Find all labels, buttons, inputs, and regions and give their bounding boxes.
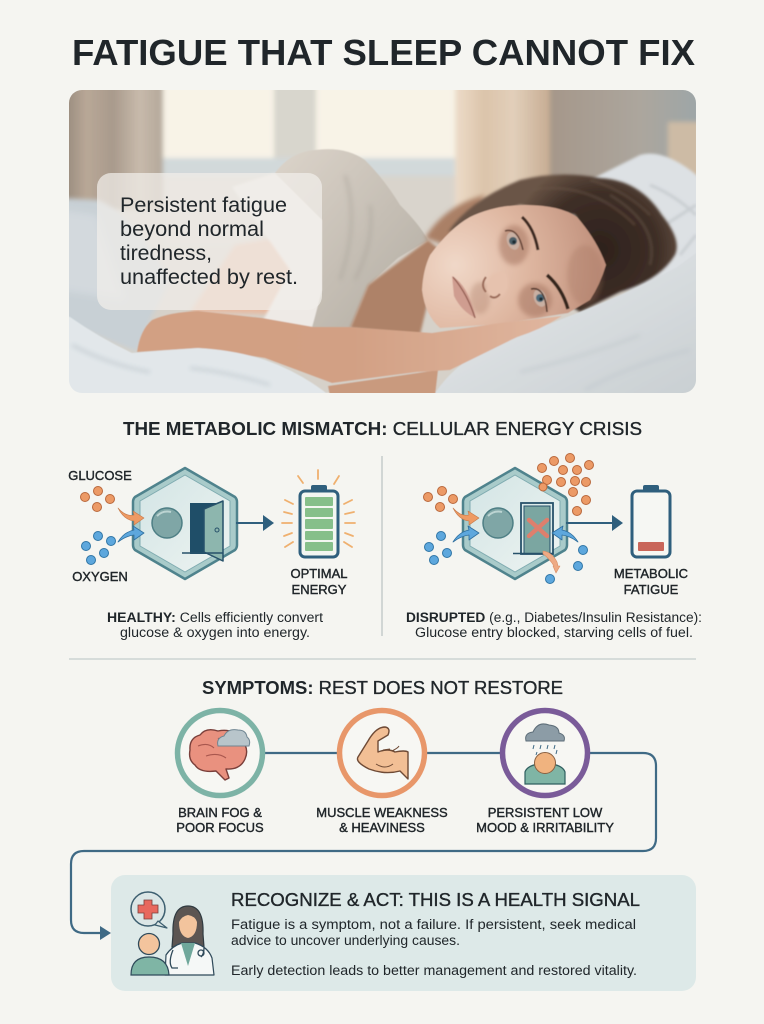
caption: healthy: glucose & oxygen into energy. [120, 625, 310, 640]
label: muscle weakness [316, 805, 448, 835]
photo: tired woman lying in bed [60, 80, 700, 396]
arrow: glucose deflected [543, 551, 560, 573]
arrow: oxygen into cell [118, 526, 144, 542]
neck and shoulder skin [350, 240, 440, 335]
excess glucose cluster [538, 454, 594, 516]
label: glucose: GLUCOSE [68, 468, 132, 483]
icon: person under rain cloud [502, 710, 588, 796]
section heading: metabolic mismatch: THE METABOLIC MISMATCH: CELLULAR ENERGY CRISIS [123, 419, 642, 439]
callout: photo caption: Persistent fatigue [120, 194, 287, 217]
closed door with X [513, 503, 553, 554]
glucose molecules [80, 486, 114, 512]
back pillow [590, 154, 700, 290]
caption: healthy [107, 610, 323, 640]
callout: photo caption: unaffected by rest. [120, 266, 298, 289]
eye shadows [470, 225, 603, 317]
label: optimal energy [290, 566, 348, 597]
label: brain fog [176, 805, 264, 835]
shirt [275, 149, 428, 328]
panel: disrupted cell [406, 454, 702, 640]
arrow: cell to fatigue [566, 515, 623, 531]
front pillow [436, 283, 696, 393]
label: metabolic fatigue [614, 566, 688, 597]
icon: brain with cloud [178, 710, 262, 796]
arrow: glucose into cell [118, 508, 144, 525]
label: optimal energy: OPTIMAL [290, 566, 348, 581]
action heading: RECOGNIZE & ACT: THIS IS A HEALTH SIGNAL [231, 890, 640, 910]
arrow: oxygen entering [453, 526, 479, 542]
connector arrow: symptoms to action [71, 753, 656, 940]
hair [448, 174, 677, 312]
label: low mood: MOOD & IRRITABILITY [476, 820, 614, 835]
icon: low battery [632, 485, 670, 557]
caption: disrupted: DISRUPTED (e.g., Diabetes/Insulin Resistance): [406, 610, 702, 625]
arm [137, 311, 562, 383]
label: optimal energy: ENERGY [292, 582, 347, 597]
label: metabolic fatigue: FATIGUE [624, 582, 679, 597]
sleeve [264, 220, 322, 327]
caption: healthy: HEALTHY: Cells efficiently convert [107, 610, 323, 625]
arrow: glucose entering [453, 508, 479, 525]
oxygen molecules [82, 532, 116, 564]
callout: photo caption [97, 173, 322, 310]
caption: disrupted: Glucose entry blocked, starving cells of fuel. [415, 625, 693, 640]
label: muscle weakness: & HEAVINESS [339, 820, 425, 835]
title: FATIGUE THAT SLEEP CANNOT FIX [72, 32, 695, 73]
hair wisps [425, 195, 485, 245]
glucose molecules outside [424, 486, 458, 512]
caption: disrupted [406, 610, 702, 640]
icon: flexed arm [340, 710, 424, 796]
healthy cell hexagon [133, 468, 237, 579]
panel: recognize and act [111, 875, 696, 991]
label: muscle weakness: MUSCLE WEAKNESS [316, 805, 448, 820]
blanket [69, 316, 326, 393]
panel: healthy cell [68, 468, 355, 640]
oxygen molecules outside [424, 532, 588, 584]
icon: full battery [282, 470, 355, 557]
action text: advice to uncover underlying causes. [231, 933, 460, 948]
upper arm behind callout [190, 240, 288, 316]
nostril [483, 277, 500, 298]
icon: patient and doctor [131, 892, 214, 975]
action text [231, 917, 637, 978]
callout: photo caption: tiredness, [120, 242, 212, 265]
section heading: symptoms: SYMPTOMS: REST DOES NOT RESTORE [202, 678, 563, 698]
symptom: muscle weakness [316, 710, 448, 835]
symptom: brain fog [176, 710, 264, 835]
left sheets [69, 196, 154, 350]
open door [182, 501, 223, 561]
arrow: cell to energy [236, 515, 274, 531]
action text: Early detection leads to better management and restored vitality. [231, 963, 637, 978]
symptom: low mood [476, 710, 614, 835]
face [422, 205, 606, 328]
eyes and brows [504, 217, 568, 312]
callout: photo caption: beyond normal [120, 218, 264, 241]
label: metabolic fatigue: METABOLIC [614, 566, 688, 581]
label: low mood [476, 805, 614, 835]
action text: Fatigue is a symptom, not a failure. If persistent, seek medical [231, 917, 636, 932]
lower forearm [328, 370, 438, 393]
mouth [452, 276, 476, 318]
label: brain fog: POOR FOCUS [176, 820, 264, 835]
disrupted cell hexagon [463, 468, 567, 579]
label: low mood: PERSISTENT LOW [488, 805, 603, 820]
nose highlight [486, 288, 490, 294]
label: oxygen: OXYGEN [72, 569, 128, 584]
label: brain fog: BRAIN FOG & [178, 805, 262, 820]
arrow: oxygen blocked [552, 526, 578, 542]
